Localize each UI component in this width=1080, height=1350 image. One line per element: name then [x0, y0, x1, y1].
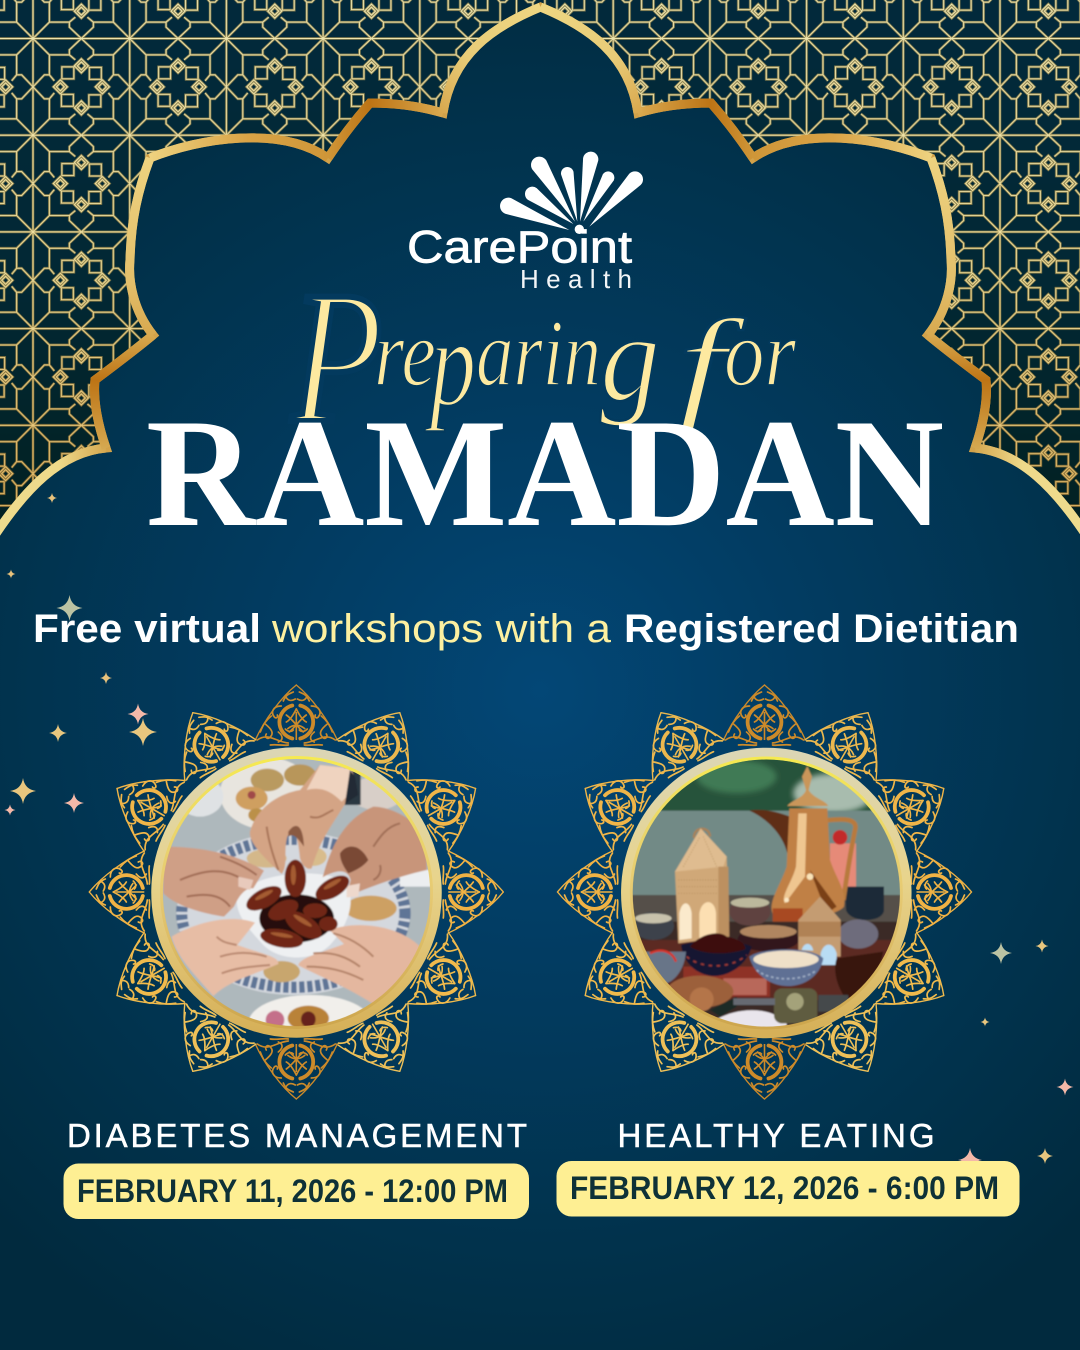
gold ring: left	[157, 753, 436, 1032]
logo sub-wordmark: Health	[520, 264, 632, 294]
logo wordmark: CarePoint	[407, 222, 633, 272]
script heading: Preparing for: re	[374, 300, 436, 406]
script heading: Preparing for: P	[289, 253, 383, 463]
date pill: left	[64, 1164, 529, 1219]
foliage	[662, 760, 872, 812]
script heading: Preparing for: or	[724, 300, 797, 406]
main title: RAMADAN: RAMADAN	[146, 387, 944, 559]
small glass	[774, 988, 817, 1023]
top hand	[250, 765, 354, 874]
left bowl	[645, 952, 686, 983]
script heading: Preparing for: arin	[476, 300, 601, 406]
workshop label: Healthy Eating: HEALTHY EATING	[618, 1117, 934, 1154]
pink drink	[830, 843, 856, 893]
small lantern	[798, 897, 841, 965]
script heading: Preparing for: p	[424, 295, 476, 433]
centre plate	[177, 832, 410, 995]
sparkles	[4, 493, 1074, 1172]
ornament: right star frame	[558, 685, 972, 1099]
big lantern	[675, 828, 729, 943]
workshop label: Diabetes Management: DIABETES MANAGEMENT	[67, 1117, 527, 1154]
right hand	[323, 807, 427, 897]
date pill: left: FEBRUARY 11, 2026 - 12:00 PM	[77, 1173, 508, 1209]
coffee pot (dallah)	[749, 766, 855, 922]
left hand	[163, 847, 264, 917]
lower-right hand	[298, 925, 420, 1004]
script heading: Preparing for: f	[678, 295, 747, 433]
date pill: right	[556, 1161, 1020, 1216]
script heading: Preparing for: g	[600, 290, 660, 428]
date pill: right: FEBRUARY 12, 2026 - 6:00 PM	[570, 1170, 999, 1206]
geometric gold lattice pattern	[0, 0, 1080, 560]
white napkin	[718, 1009, 788, 1027]
dark bowl interior	[259, 894, 334, 942]
bowl	[237, 873, 351, 957]
gold ring: right	[627, 754, 906, 1032]
top plates	[220, 760, 304, 828]
subheading: Free virtual	[33, 607, 261, 651]
logo mark: fan	[500, 152, 643, 234]
ornament: left star frame	[89, 685, 503, 1099]
nuts bowl	[737, 934, 798, 952]
dates	[243, 860, 353, 951]
back bowls	[730, 906, 770, 926]
front right glass	[835, 952, 883, 1000]
dark glass	[845, 887, 884, 920]
CarePoint Health logo	[407, 152, 643, 294]
subheading	[33, 607, 1019, 651]
subheading: workshops with a	[271, 607, 612, 651]
photo: iftar table with lantern and coffee pot	[632, 760, 900, 1027]
lower-left hand	[172, 919, 278, 996]
dates bowl	[681, 941, 752, 976]
arch gold border	[0, 7, 1080, 535]
sofa	[632, 810, 900, 896]
bottom plate	[249, 994, 363, 1026]
subheading: Registered Dietitian	[624, 607, 1019, 651]
hummus bowl	[749, 949, 823, 986]
front dates plate	[667, 976, 733, 1008]
script heading: Preparing for	[289, 253, 797, 463]
photo: hands sharing dates	[162, 759, 430, 1026]
